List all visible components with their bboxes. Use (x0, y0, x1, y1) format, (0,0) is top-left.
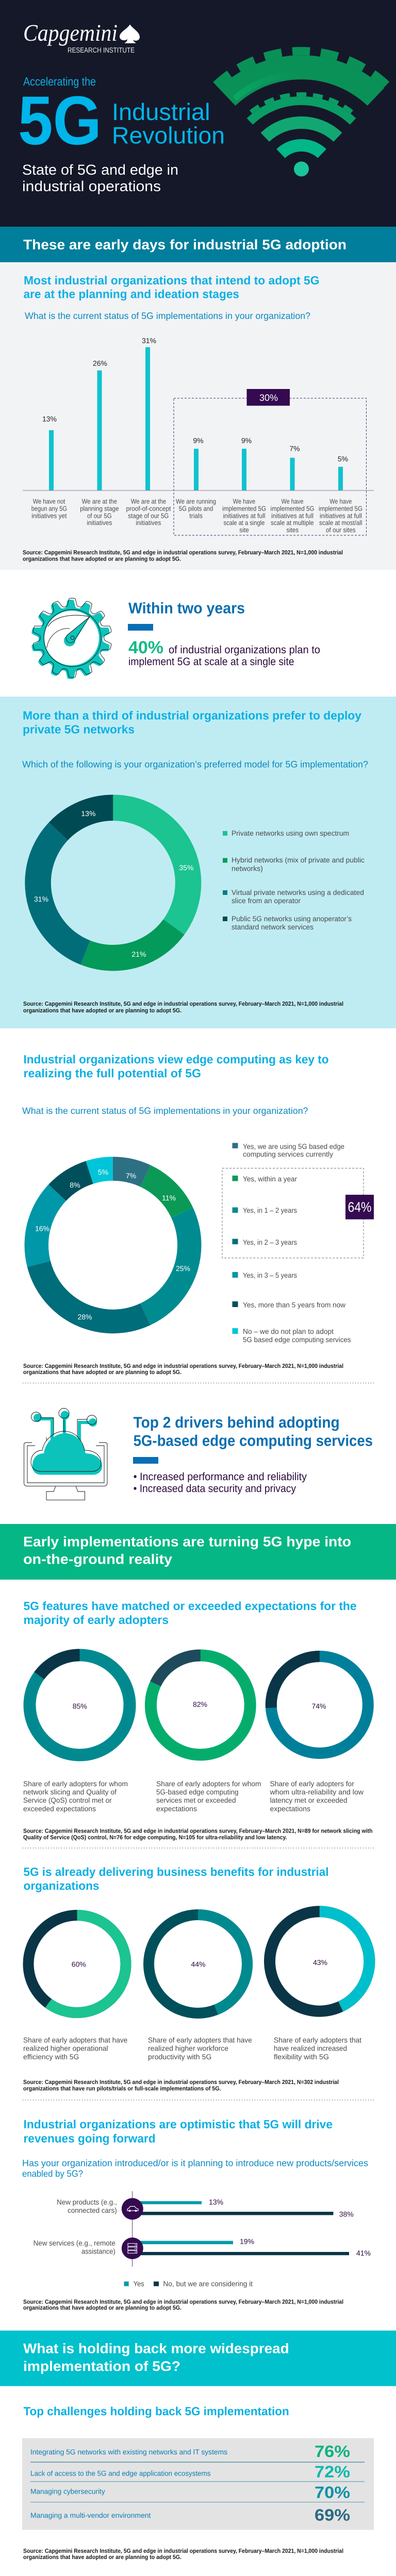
text: donut captions (23, 1780, 364, 1813)
legend: standard network services (232, 923, 314, 931)
heading: edge computing: realizing the full potential of 5G (24, 1066, 201, 1080)
band: early implementations: on-the-ground reality (23, 1552, 172, 1567)
callout: within two years (128, 600, 320, 668)
row: ecosystem access: Lack of access to the 5G and edge application ecosystems (30, 2469, 210, 2478)
header background (0, 0, 396, 227)
donut: 43%: 43% (313, 1958, 327, 1967)
panel: challenges table (22, 2438, 374, 2530)
source note: Source: Capgemini Research Institute, 5G and edge in industrial operations survey, February–March 2021, N=1,000 industrial (23, 550, 343, 556)
bar chart: We are running (176, 498, 216, 505)
icon: speedometer gear (30, 598, 112, 679)
title block: 5G (18, 82, 102, 159)
source note (23, 550, 343, 563)
horizontal bar chart: New products (e.g., (57, 2198, 117, 2206)
heading: More than a third of industrial organizations prefer to deploy (23, 709, 361, 722)
text: donut captions: flexibility with 5G (274, 2053, 329, 2061)
legend: computing services currently (243, 1150, 333, 1158)
heading: Most industrial organizations that intend to adopt 5G (24, 274, 320, 287)
legend: slice from an operator (232, 896, 301, 905)
text: donut captions: whom ultra-reliability and low (269, 1788, 364, 1796)
source note (23, 2299, 343, 2311)
horizontal bar chart: New services (e.g., remote (34, 2239, 116, 2247)
text: donut captions: productivity with 5G (148, 2053, 211, 2061)
legend: Yes (134, 2279, 144, 2287)
donut chart: 21% (131, 950, 146, 958)
text: donut captions: exceeded expectations (23, 1805, 96, 1813)
row: ecosystem access (30, 2463, 350, 2481)
source note (23, 2548, 343, 2561)
band: holding back: What is holding back more widespread (23, 2341, 289, 2357)
legend: Yes, we are using 5G based edge (243, 1142, 344, 1150)
row: integrating (30, 2442, 350, 2461)
heading: top challenges: Top challenges holding back 5G implementation (24, 2404, 289, 2418)
bar chart: scale at multiple (271, 519, 314, 527)
logo: Capgemini Research Institute (23, 20, 140, 54)
source note: Quality of Service (QoS) control, N=76 for edge computing, N=105 for ultra-reliability and low latency. (23, 1835, 287, 1841)
source note: organizations that have adopted or are planning to adopt 5G. (23, 556, 181, 563)
heading (24, 274, 320, 301)
heading: 5G features: majority of early adopters (24, 1613, 169, 1626)
bar chart: of our 5G (87, 512, 112, 519)
title block: Accelerating the (23, 75, 96, 88)
band: early implementations: Early implementations are turning 5G hype into (23, 1534, 351, 1550)
source note: organizations that have adopted or are planning to adopt 5G. (23, 1008, 182, 1014)
horizontal bar chart (34, 2191, 371, 2267)
legend: Virtual private networks using a dedicated (232, 888, 364, 896)
question: Which of the following is your organization’s preferred model for 5G implementation? (22, 759, 368, 770)
heading: business benefits: organizations (24, 1879, 99, 1892)
heading: revenues: revenues going forward (24, 2132, 156, 2145)
question: enabled by 5G? (22, 2168, 83, 2179)
bar chart: We have (329, 498, 352, 505)
text: donut captions: latency met or exceeded (270, 1796, 348, 1804)
title block: State of 5G and edge in (22, 162, 178, 178)
bar chart: We have (233, 498, 255, 505)
source note (23, 1363, 343, 1376)
question: Has your organization introduced/or is it planning to introduce new products/services (22, 2158, 368, 2168)
heading: 5G features (24, 1599, 357, 1626)
horizontal bar chart: connected cars) (68, 2206, 117, 2214)
horizontal bar chart: 38% (339, 2210, 354, 2218)
source note: Source: Capgemini Research Institute, 5G and edge in industrial operations survey, February–March 2021, N=89 for network slicing with (23, 1828, 372, 1834)
heading: edge computing: Industrial organizations view edge computing as key to (24, 1053, 329, 1066)
source note: organizations that have adopted or are planning to adopt 5G. (23, 2305, 182, 2311)
legend (232, 1142, 351, 1344)
row: cybersecurity: Managing cybersecurity (30, 2487, 105, 2496)
donut: 85%: 85% (73, 1702, 87, 1710)
bar chart: initiatives yet (31, 512, 67, 519)
horizontal bar chart: 19% (240, 2237, 254, 2245)
donut chart: edge timeline: 25% (176, 1264, 190, 1273)
bar chart: initiatives at full (223, 512, 266, 519)
callout: top 2 drivers (133, 1414, 373, 1495)
text: donut captions: Share of early adopters for whom (23, 1780, 128, 1788)
text: donut captions: Share of early adopters for (270, 1780, 354, 1788)
text: donut captions: have realized increased (274, 2044, 347, 2053)
bar chart: 26% (93, 359, 107, 367)
bar chart: trials (189, 512, 203, 519)
text: donut captions: services met or exceeded (156, 1796, 236, 1804)
source note: Source: Capgemini Research Institute, 5G and edge in industrial operations survey, February–March 2021, N=1,000 industrial (23, 2299, 343, 2306)
heading: revenues: Industrial organizations are optimistic that 5G will drive (24, 2117, 333, 2131)
bar chart: initiatives (136, 519, 161, 527)
text: donut captions: Share of early adopters that have (148, 2036, 252, 2044)
text: donut captions: realized higher workforce (148, 2044, 228, 2053)
text: donut captions: network slicing and Quality of (23, 1788, 117, 1796)
row: multi-vendor: 69% (315, 2505, 350, 2524)
heading: are at the planning and ideation stages (24, 287, 239, 301)
donut: 85% (30, 1655, 130, 1755)
band: early implementations (0, 1524, 396, 1580)
callout: within two years: 40% (128, 638, 163, 657)
bar chart: We have (282, 498, 303, 505)
bar chart: 31% (142, 336, 156, 345)
horizontal bar chart: assistance) (81, 2247, 116, 2256)
source note: Source: Capgemini Research Institute, 5G and edge in industrial operations survey, February–March 2021, N=1,000 industrial (23, 2548, 343, 2554)
row: ecosystem access: 72% (315, 2463, 350, 2481)
text: donut captions: Share of early adopters that (274, 2036, 361, 2044)
horizontal bar chart: 41% (356, 2249, 371, 2257)
bar chart: We are at the (131, 498, 166, 505)
row: cybersecurity (30, 2483, 350, 2501)
donut: 60%: 60% (72, 1960, 86, 1969)
heading: business benefits: 5G is already delivering business benefits for industrial (24, 1865, 329, 1878)
title block: Revolution (112, 122, 225, 148)
band: holding back (0, 2331, 396, 2386)
bar chart: initiatives (87, 519, 112, 527)
text: donut captions: Share of early adopters that have (23, 2036, 127, 2044)
donut: 60% (28, 1916, 126, 2012)
bar chart (23, 336, 374, 534)
legend: Private networks using own spectrum (232, 829, 349, 837)
bar chart: 5% (338, 455, 348, 463)
donut chart: edge timeline: 8% (70, 1181, 80, 1189)
donut chart: 13% (81, 809, 95, 818)
legend: No, but we are considering it (163, 2279, 253, 2287)
bar chart: of our sites (326, 526, 356, 534)
source note: organizations that have adopted or are planning to adopt 5G. (23, 2554, 182, 2561)
bar chart: scale at a single (224, 519, 265, 527)
callout: 30% dashed group: 30% (259, 393, 278, 403)
callout: 64% dashed group: 64% (348, 1199, 371, 1215)
icon: cloud computing monitor (24, 1409, 107, 1500)
legend: Hybrid networks (mix of private and public (232, 856, 365, 864)
text: donut captions: Share of early adopters for whom (156, 1780, 261, 1788)
text: donut captions (23, 2036, 361, 2061)
band: holding back: implementation of 5G? (23, 2359, 180, 2374)
callout: top 2 drivers: • Increased data security and privacy (134, 1483, 296, 1495)
heading: edge computing (24, 1053, 329, 1080)
bar chart: scale at most/all (319, 519, 362, 527)
legend: Public 5G networks using anoperator’s (232, 914, 352, 923)
bar chart: implemented 5G (319, 505, 362, 513)
text: donut captions: Service (QoS) control met or (23, 1796, 112, 1804)
icon: wifi gears (216, 51, 387, 176)
row: multi-vendor (30, 2505, 350, 2524)
source note (23, 2079, 339, 2092)
callout: 64% dashed group (222, 1168, 374, 1258)
legend: 5G based edge computing services (243, 1335, 351, 1344)
text: donut captions: 5G-based edge computing (156, 1788, 238, 1796)
question (22, 2158, 368, 2179)
bar chart: 7% (289, 445, 300, 453)
title block (18, 75, 225, 194)
donut: 74% (271, 1656, 368, 1753)
bar chart: 5G pilots and (179, 505, 213, 513)
legend: Yes, in 1 – 2 years (243, 1206, 297, 1214)
heading: revenues (24, 2117, 333, 2145)
title block: industrial operations (22, 178, 161, 194)
bar chart: stage of our 5G (128, 512, 169, 519)
heading: business benefits (24, 1865, 329, 1892)
question: What is the current status of 5G implementations in your organization? (22, 1106, 308, 1116)
donut chart (34, 808, 193, 958)
icon: car (122, 2198, 143, 2219)
callout: within two years: of industrial organizations plan to (169, 644, 320, 656)
bar chart: We have not (33, 498, 65, 505)
band: early days heading: These are early days for industrial 5G adoption (23, 237, 346, 252)
donut chart: edge timeline: 16% (35, 1225, 50, 1233)
bar chart: site (239, 526, 249, 534)
legend (223, 829, 365, 931)
donut: 43% (270, 1911, 369, 2011)
bar chart: implemented 5G (222, 505, 266, 513)
bar chart: sites (287, 526, 299, 534)
callout: top 2 drivers: • Increased performance and reliability (134, 1471, 307, 1483)
icon: servers (122, 2238, 143, 2259)
source note: Source: Capgemini Research Institute, 5G and edge in industrial operations survey, February–March 2021, N=302 industrial (23, 2079, 339, 2086)
panel: private 5G networks (0, 697, 396, 1028)
text: donut captions: realized higher operational (23, 2044, 108, 2053)
source note: organizations that have adopted or are planning to adopt 5G. (23, 1369, 182, 1376)
legend: No – we do not plan to adopt (243, 1327, 334, 1335)
row: integrating: 76% (315, 2442, 350, 2461)
donut: 82%: 82% (193, 1700, 207, 1708)
donut chart: edge timeline (35, 1168, 190, 1321)
legend: Yes, in 3 – 5 years (243, 1271, 297, 1279)
row: cybersecurity: 70% (315, 2483, 350, 2501)
callout: 30% dashed group (174, 389, 366, 535)
legend: Yes, within a year (243, 1175, 297, 1183)
donut: 74%: 74% (311, 1702, 326, 1710)
text: donut captions: expectations (270, 1805, 310, 1813)
source note: organizations that have run pilots/trials or full-scale implementations of 5G. (23, 2086, 221, 2092)
donut: 44%: 44% (191, 1960, 206, 1969)
source note: Source: Capgemini Research Institute, 5G and edge in industrial operations survey, February–March 2021, N=1,000 industrial (23, 1001, 343, 1007)
bar chart: 13% (42, 415, 57, 423)
heading: 5G features: 5G features have matched or exceeded expectations for the (24, 1599, 357, 1613)
donut: 44% (148, 1914, 248, 2013)
donut chart: edge timeline: 7% (126, 1172, 136, 1180)
logo: Capgemini Research Institute: RESEARCH INSTITUTE (68, 46, 135, 54)
bar chart: planning stage (80, 505, 119, 513)
title block: Industrial (112, 98, 210, 125)
callout: top 2 drivers: 5G-based edge computing services (134, 1432, 373, 1450)
donut chart: 35% (179, 863, 193, 872)
bar chart: proof-of-concept (126, 505, 171, 513)
row: integrating: Integrating 5G networks with existing networks and IT systems (30, 2448, 227, 2456)
text: donut captions: expectations (156, 1805, 197, 1813)
band: early days heading (0, 227, 396, 262)
donut: 82% (151, 1655, 250, 1755)
bar chart: 9% (241, 436, 252, 445)
logo: Capgemini Research Institute: Capgemini (23, 20, 118, 46)
row: multi-vendor: Managing a multi-vendor environment (30, 2511, 151, 2519)
legend (124, 2279, 253, 2287)
bar chart: initiatives at full (271, 512, 314, 519)
panel: implementation status (0, 262, 396, 570)
legend: networks) (232, 865, 263, 873)
source note: Source: Capgemini Research Institute, 5G and edge in industrial operations survey, February–March 2021, N=1,000 industrial (23, 1363, 343, 1369)
horizontal bar chart: 13% (209, 2198, 223, 2206)
callout: within two years: Within two years (128, 600, 245, 617)
legend: Yes, in 2 – 3 years (243, 1238, 297, 1246)
donut chart: edge timeline: 28% (77, 1313, 92, 1321)
source note (23, 1001, 343, 1014)
heading: private 5G networks (23, 722, 135, 736)
text: donut captions: efficiency with 5G (23, 2053, 79, 2061)
callout: within two years: implement 5G at scale at a single site (128, 656, 294, 668)
callout: top 2 drivers: Top 2 drivers behind adopting (134, 1414, 340, 1431)
legend: Yes, more than 5 years from now (243, 1300, 346, 1309)
source note (23, 1828, 372, 1841)
bar chart: We are at the (82, 498, 117, 505)
donut chart: edge timeline: 11% (162, 1194, 176, 1202)
heading (23, 709, 361, 736)
bar chart: begun any 5G (31, 505, 67, 513)
donut chart: 31% (34, 895, 48, 903)
question: What is the current status of 5G implementations in your organization? (25, 311, 310, 321)
bar chart: 9% (193, 436, 204, 445)
bar chart: initiatives at full (320, 512, 362, 519)
bar chart: implemented 5G (270, 505, 315, 513)
donut chart: edge timeline: 5% (98, 1168, 108, 1176)
